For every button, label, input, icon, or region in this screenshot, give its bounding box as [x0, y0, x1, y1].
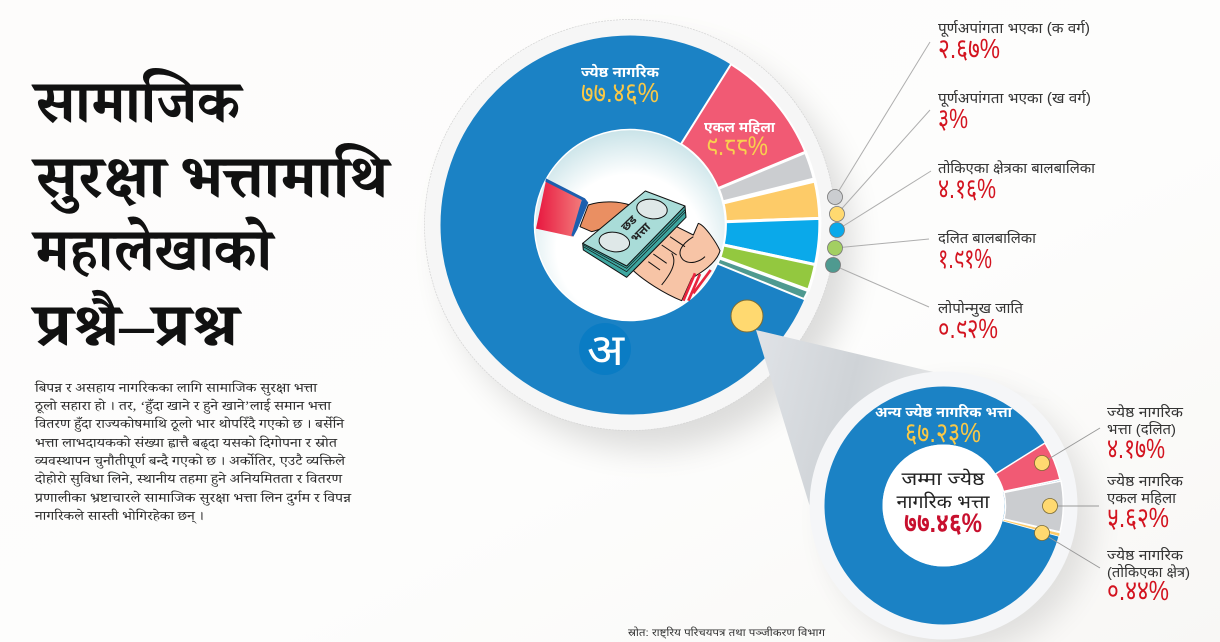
slice: endangered groups: [718, 258, 808, 299]
intro text block: बिपन्न र असहाय नागरिकका लागि सामाजिक सुरक्षा भत्ता: [34, 380, 318, 396]
secondary dots: [1034, 456, 1058, 540]
centre label: ७७.४६%: [904, 508, 982, 538]
icon: banknote stack: [583, 191, 686, 277]
intro text block: व्यवस्थापन चुनौतीपूर्ण बन्दै गएको छ । अर्कोतिर, एउटै व्यक्तिले: [34, 453, 347, 469]
title: महालेखाको: [31, 215, 276, 283]
legend: disability B: [938, 90, 1091, 134]
donut hole: [882, 444, 1004, 566]
legend: designated-area seniors: ज्येष्ठ नागरिक: [1107, 546, 1183, 563]
slice: dalit children: [720, 245, 815, 290]
label: other seniors: [875, 403, 1013, 448]
slice: single women seniors: [1004, 481, 1063, 532]
legend: dalit seniors: भत्ता (दलित): [1107, 421, 1176, 437]
logo: अ: [587, 326, 626, 375]
title: सुरक्षा भत्तामाथि: [31, 142, 392, 215]
legend: disability A: [938, 20, 1090, 64]
legend: single women seniors: ५.६२%: [1107, 502, 1169, 533]
legend: dalit seniors: [1107, 403, 1183, 464]
label: senior citizens: ७७.४६%: [581, 77, 659, 108]
legend: single women seniors: [1107, 472, 1183, 533]
label: senior citizens: ज्येष्ठ नागरिक: [581, 63, 659, 80]
legend: disability B: ३%: [938, 103, 968, 134]
leader lines: secondary donut: [1042, 428, 1100, 568]
centre label: [896, 468, 990, 538]
leader lines: main donut: [833, 42, 931, 307]
legend: endangered groups: लोपोन्मुख जाति: [938, 300, 1024, 318]
legend: designated-area children: तोकिएका क्षेत्रका बालबालिका: [938, 159, 1095, 177]
slice: dalit seniors: [996, 443, 1060, 492]
slice: disability A: [718, 152, 814, 202]
slice: designated-area children: [723, 218, 820, 265]
secondary donut chart: [810, 372, 1078, 640]
slice: designated-area seniors: [1003, 520, 1060, 536]
legend: designated-area seniors: ०.४४%: [1107, 575, 1169, 606]
source note: स्रोत: राष्ट्रिय परिचयपत्र तथा पञ्जीकरण विभाग: [628, 626, 826, 639]
legend: disability A: २.६७%: [938, 33, 1000, 64]
intro text block: भत्ता लाभदायकको संख्या ह्वात्तै बढ्दा यसको दिगोपना र स्रोत: [35, 435, 338, 451]
legend: designated-area children: [938, 159, 1095, 204]
intro text block: वितरण हुँदा राज्यकोषमाथि ठूलो भार थोपरिँदै गएको छ । बर्सेनि: [34, 416, 346, 432]
label: single women: [704, 119, 776, 161]
legend: endangered groups: ०.९२%: [938, 313, 998, 344]
legend: dalit seniors: ४.१७%: [1107, 433, 1165, 464]
legend: dalit children: [938, 230, 1036, 274]
intro text block: प्रणालीका भ्रष्टाचारले सामाजिक सुरक्षा भत्ता लिन दुर्गम र विपन्न: [34, 490, 353, 506]
legend: single women seniors: एकल महिला: [1107, 490, 1176, 506]
slice: disability B: [723, 181, 820, 222]
callout source dot: [731, 300, 763, 332]
icon: receiving hands: [633, 223, 720, 301]
title: [30, 67, 392, 358]
legend: disability A: पूर्णअपांगता भएका (क वर्ग): [938, 20, 1090, 38]
legend: disability B: पूर्णअपांगता भएका (ख वर्ग): [938, 90, 1091, 108]
title: प्रश्नै–प्रश्न: [30, 289, 243, 358]
legend: dalit children: १.९१%: [938, 243, 992, 274]
label: single women: एकल महिला: [704, 119, 776, 135]
icon: banknote stack: भत्ता: [628, 220, 653, 245]
logo: [579, 323, 631, 375]
main donut chart: [424, 20, 836, 430]
legend: designated-area seniors: (तोकिएका क्षेत्र): [1107, 563, 1190, 580]
intro text block: ठूलो सहारा हो । तर, ‘हुँदा खाने र हुने खाने’लाई समान भत्ता: [34, 398, 332, 414]
icon: banknote stack: छड: [618, 212, 640, 234]
label: single women: ९.८८%: [706, 131, 768, 161]
legend: dalit seniors: ज्येष्ठ नागरिक: [1107, 403, 1183, 420]
label: other seniors: अन्य ज्येष्ठ नागरिक भत्ता: [875, 403, 1013, 420]
legend: designated-area seniors: [1107, 546, 1190, 606]
icon: giving hand: [580, 202, 633, 232]
intro text block: नागरिकले सास्ती भोगिरहेका छन् ।: [34, 508, 204, 524]
donut hole: [534, 130, 726, 320]
centre label: नागरिक भत्ता: [896, 492, 990, 512]
legend: dalit children: दलित बालबालिका: [938, 230, 1036, 247]
icon: sleeve: [536, 178, 588, 237]
title: सामाजिक: [31, 67, 244, 135]
callout wedge: [756, 330, 1052, 520]
intro text block: [34, 380, 353, 524]
label: senior citizens: [581, 63, 659, 108]
label: other seniors: ६७.२३%: [905, 417, 981, 448]
legend: single women seniors: ज्येष्ठ नागरिक: [1107, 472, 1183, 489]
legend dots: [826, 190, 844, 272]
slice: single women: [681, 64, 806, 188]
centre label: जम्मा ज्येष्ठ: [902, 468, 985, 489]
intro text block: दोहोरो सुविधा लिने, स्थानीय तहमा हुने अनियमितता र वितरण: [34, 471, 343, 487]
legend: designated-area children: ४.१६%: [938, 173, 996, 204]
legend: endangered groups: [938, 300, 1024, 344]
illustration: handing over allowance: [536, 178, 720, 301]
